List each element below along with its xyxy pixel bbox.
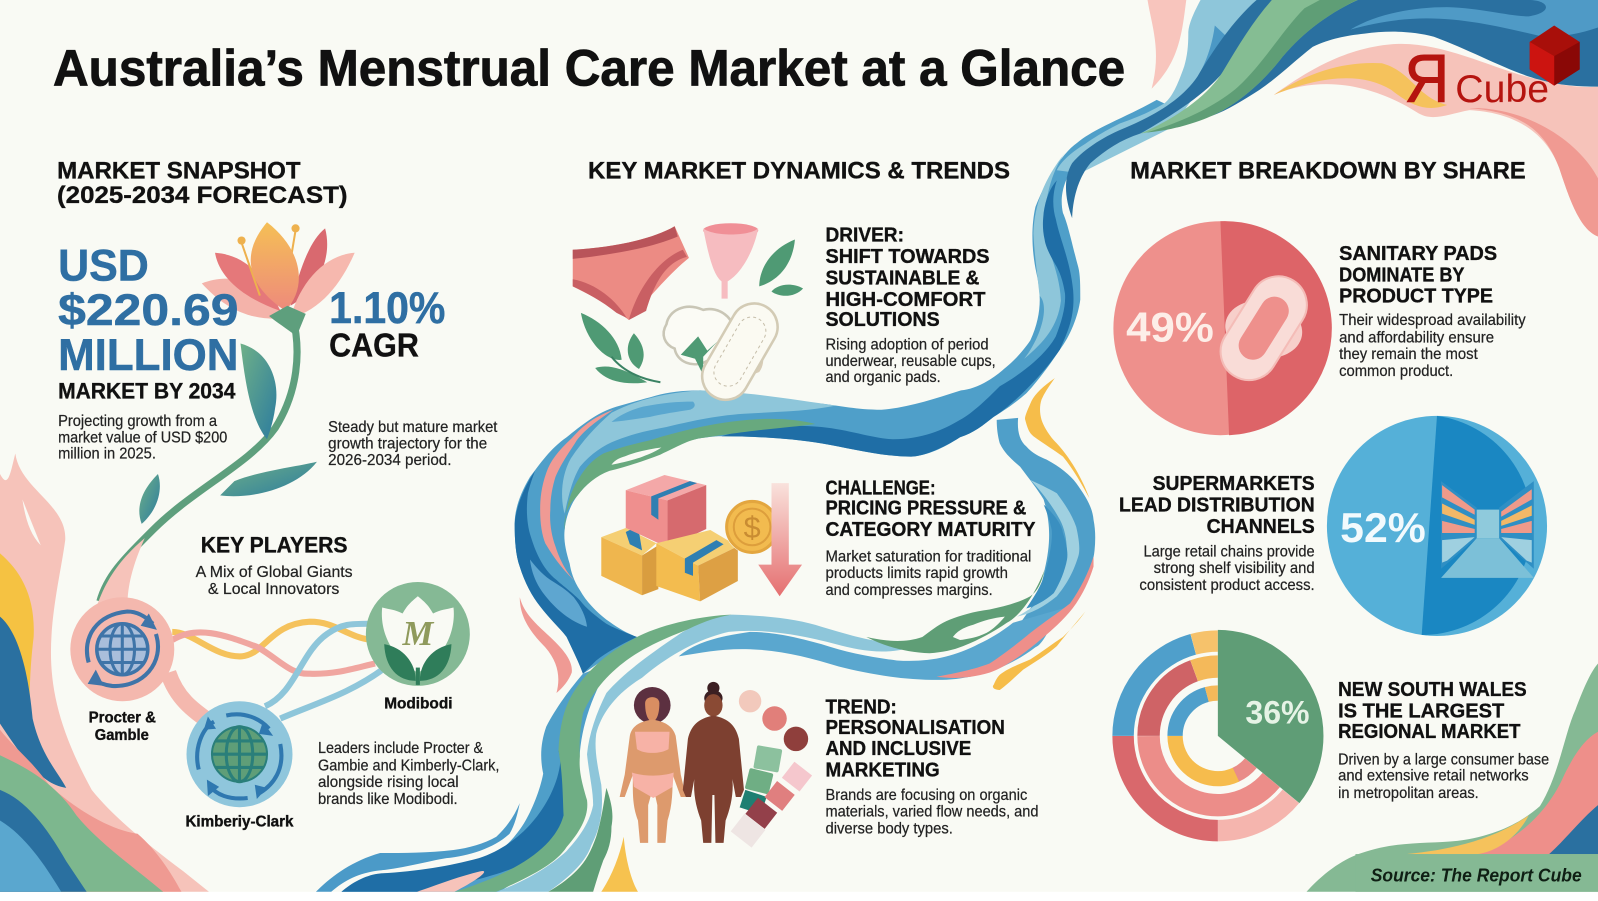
illustration: flower and stem [100,222,355,601]
text: new south wales: IS THE LARGEST [1338,701,1505,723]
text: projecting growth [58,413,227,463]
text: trend: materials, varied flow needs, and [825,803,1038,820]
text: sanitary pads: DOMINATE BY [1339,264,1465,286]
chart: sanitary pads 49% [1113,221,1332,435]
ribbon: upper S band overlays [1024,153,1065,359]
text: driver: and organic pads. [825,369,941,386]
text: supermarkets: Large retail chains provide [1143,543,1315,560]
text: supermarkets: consistent product access. [1139,577,1315,594]
text: leaders: alongside rising local [318,774,459,791]
text: leaders: Gambie and Kimberly-Clark, [318,758,499,775]
text: challenge: CATEGORY MATURITY [825,519,1036,541]
illustration: boxes, coin and falling arrow [601,475,802,601]
stat: market size: MARKET BY 2034 [58,379,236,404]
ribbon: left edge flames and waves [0,454,209,892]
text: driver: SOLUTIONS [825,309,940,331]
heading: market snapshot: MARKET SNAPSHOT [57,157,301,184]
text: trend: diverse body types. [825,821,953,838]
text: sanitary pads: common product. [1339,363,1453,380]
text: challenge: Market saturation for traditional [825,549,1031,566]
ribbon: right loop [997,418,1095,633]
icon: Modibodi logo: M [401,615,434,653]
chart: supermarkets 52% [1327,416,1547,636]
text: supermarkets: SUPERMARKETS [1153,473,1315,495]
ribbon: top-right blue and green sweep [1211,0,1598,116]
text: driver: HIGH-COMFORT [825,289,986,311]
heading: key players: A Mix of Global Giants [196,564,353,581]
label: Procter & Gamble [89,710,156,744]
stat: market size [58,239,238,404]
label: Procter & Gamble: Procter & [89,710,156,727]
text: projecting growth: million in 2025. [58,446,156,463]
text: sanitary pads: PRODUCT TYPE [1339,286,1493,308]
text: sanitary pads: and affordability ensure [1339,329,1494,346]
connectors between players [97,538,385,729]
text: trend: PERSONALISATION [825,717,1005,739]
text: new south wales: Driven by a large consumer base [1338,751,1549,768]
logo: Report Cube: Я [1404,42,1449,117]
text: new south wales: in metropolitan areas. [1338,785,1479,802]
label: Modibodi: Modibodi [384,695,452,712]
text: steady growth: 2026-2034 period. [328,452,451,469]
text: steady growth [328,419,498,469]
text: driver: underwear, reusable cups, [825,353,996,370]
text: projecting growth: market value of USD $200 [58,429,227,446]
heading: key players: KEY PLAYERS [201,532,348,557]
text: driver: SHIFT TOWARDS [825,246,990,268]
text: supermarkets: LEAD DISTRIBUTION [1119,495,1315,517]
source box [1355,854,1598,892]
text: challenge: PRICING PRESSURE & [825,498,1027,520]
text: trend: AND INCLUSIVE [825,738,971,760]
text: trend: MARKETING [825,760,940,782]
heading: key players: & Local Innovators [208,581,340,598]
illustration: period products [573,223,803,408]
text: new south wales: REGIONAL MARKET [1338,721,1521,743]
text: supermarkets: CHANNELS [1207,516,1315,538]
text: driver: Rising adoption of period [825,337,989,354]
text: challenge: and compresses margins. [825,582,993,599]
text: steady growth: Steady but mature market [328,419,498,436]
heading: market breakdown: MARKET BREAKDOWN BY SHARE [1130,157,1526,184]
text: supermarkets: strong shelf visibility and [1154,560,1315,577]
logo: Report Cube [1404,26,1580,117]
heading: market snapshot [57,157,348,209]
heading: key market dynamics: KEY MARKET DYNAMICS & TRENDS [588,157,1010,184]
text: leaders: brands like Modibodi. [318,791,458,808]
text: supermarkets [1119,473,1315,594]
heading: key players [196,532,353,598]
stat: market size: MILLION [58,329,238,380]
ribbon: salmon flame [520,597,572,693]
icon: Procter & Gamble globe [70,597,174,701]
chart: NSW 36% donut [1084,602,1351,869]
text: sanitary pads: they remain the most [1339,346,1478,363]
text: leaders [318,740,499,808]
chart: NSW 36% donut: 36% [1245,694,1310,731]
icon: Kimberly-Clark globe [187,701,292,807]
stat: CAGR: 1.10% [329,282,445,333]
source box: Source: The Report Cube [1371,865,1582,886]
text: trend: Brands are focusing on organic [825,787,1028,804]
text: challenge [825,477,1036,599]
stat: CAGR: CAGR [329,328,419,365]
ribbon: lower band running right [679,606,1070,680]
text: new south wales: NEW SOUTH WALES [1338,679,1527,701]
chart: sanitary pads 49%: 49% [1126,303,1214,350]
logo: Report Cube: Cube [1455,68,1549,111]
heading: market snapshot: (2025-2034 FORECAST) [57,182,348,209]
ribbon: bottom-right waves [1307,663,1598,892]
text: sanitary pads [1339,243,1526,380]
icon: Modibodi logo [366,582,470,686]
text: driver: DRIVER: [825,225,904,247]
text: trend: TREND: [825,696,897,718]
ribbon: lower band descending left [341,662,611,892]
ribbon: top-right pink wash [1274,44,1598,236]
label: Procter & Gamble: Gamble [95,727,149,744]
text: driver [825,225,996,386]
text: sanitary pads: SANITARY PADS [1339,243,1497,265]
stat: CAGR [329,282,445,365]
text: driver: SUSTAINABLE & [825,267,980,289]
text: new south wales [1338,679,1549,802]
text: trend [825,696,1038,838]
text: projecting growth: Projecting growth from a [58,413,218,430]
text: challenge: CHALLENGE: [825,477,936,499]
chart: supermarkets 52%: 52% [1340,504,1426,551]
illustration: diverse bodies and swatches [620,682,812,848]
illustration: boxes, coin and falling arrow: $ [744,511,761,545]
text: leaders: Leaders include Procter & [318,740,483,757]
text: sanitary pads: Their widesproad availability [1339,312,1526,329]
stat: market size: USD [58,239,149,290]
text: steady growth: growth trajectory for the [328,435,487,452]
title: Australia’s Menstrual Care Market at a Glance [53,40,1125,97]
stat: market size: $220.69 [58,284,238,335]
text: challenge: products limits rapid growth [825,565,1008,582]
label: Kimberly-Clark: Kimberiy-Clark [185,814,294,831]
ribbon: yellow accents beside the loop [1025,378,1089,498]
text: new south wales: and extensive retail networks [1338,768,1529,785]
